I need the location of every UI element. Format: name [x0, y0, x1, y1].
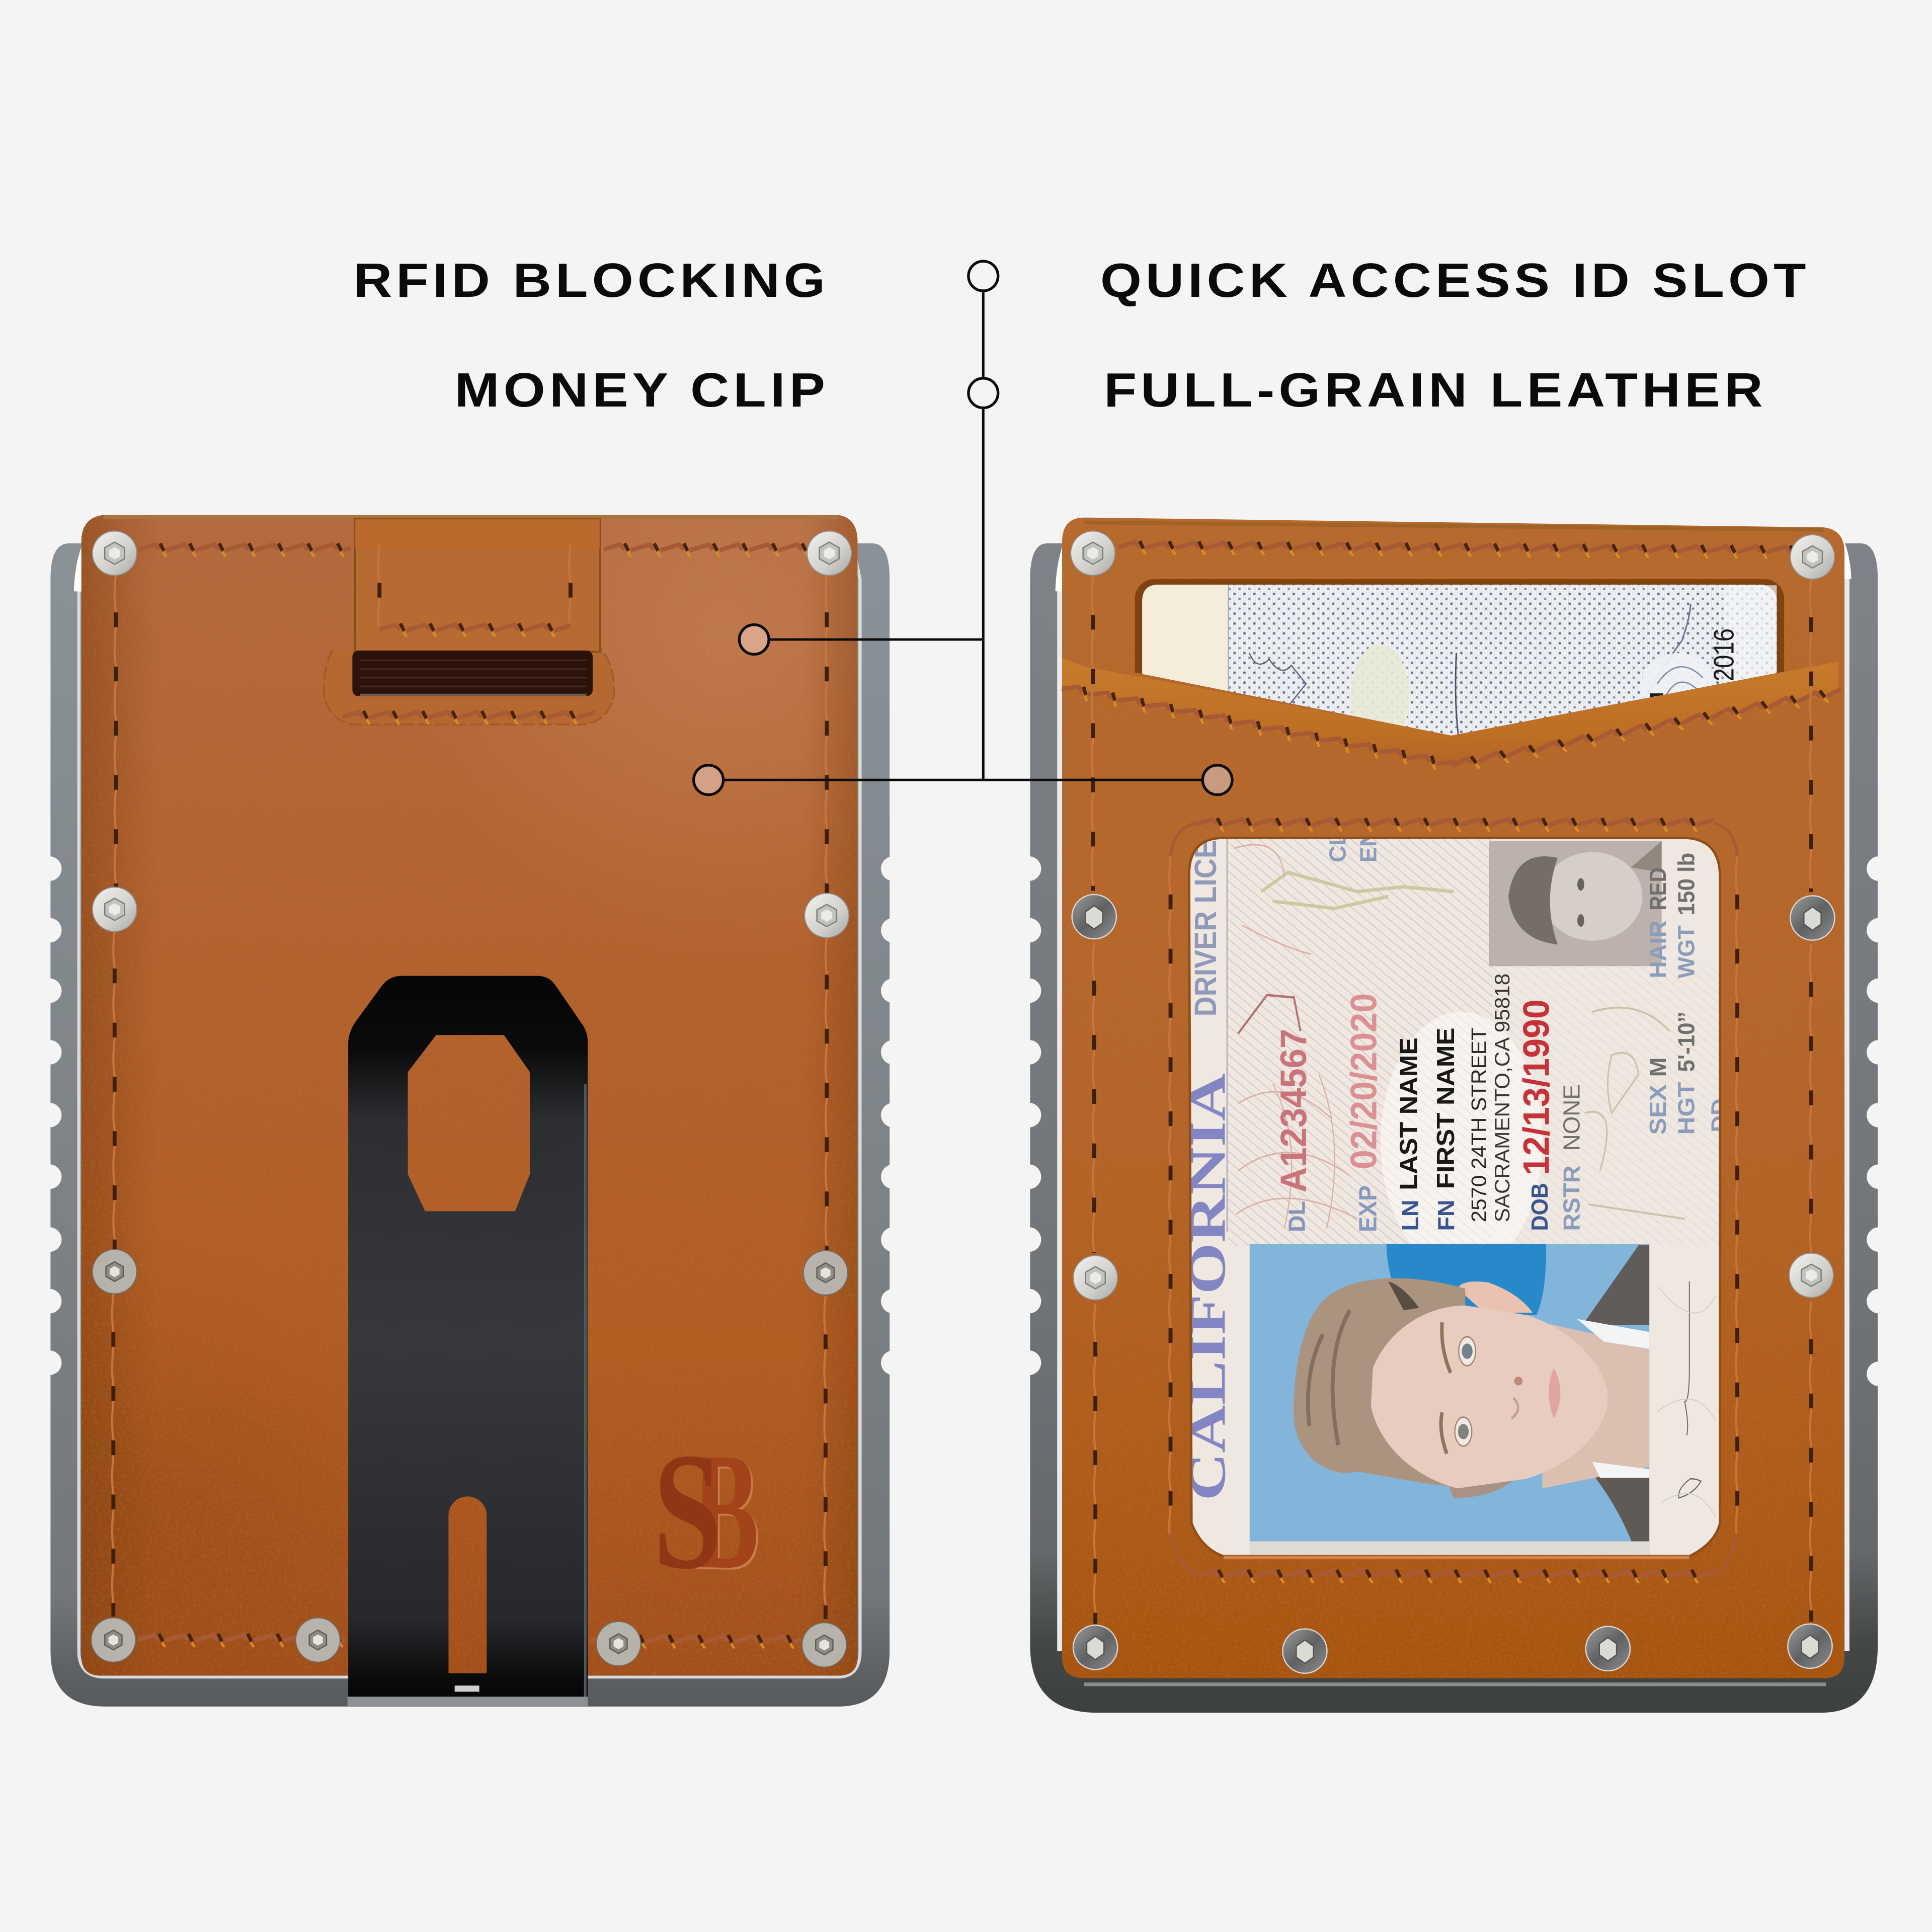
license number: DL — [1283, 1201, 1310, 1232]
leather panel: front wallet — [1054, 511, 1855, 1688]
metal frame: front wallet — [1016, 524, 1891, 1713]
leather panel: back wallet — [74, 505, 869, 1688]
wallet: back view with money clip — [37, 505, 906, 1707]
address: 2570 24TH STREET — [1467, 1027, 1490, 1222]
label: full-grain leather: FULL-GRAIN LEATHER — [1104, 364, 1767, 417]
card date: 2016 — [1708, 628, 1740, 681]
driver license in window: WGT — [1673, 925, 1699, 978]
ghost portrait — [1489, 841, 1662, 966]
marker: leather dot two — [694, 765, 723, 795]
driver license in window: SACRAMENTO,CA 95818 — [1490, 974, 1514, 1222]
driver license in window: FIRST NAME — [1432, 1027, 1460, 1189]
names: LN — [1397, 1200, 1423, 1231]
driver license in window: 12/13/1990 — [1515, 999, 1557, 1175]
embossed SB logo: B — [694, 1420, 761, 1606]
embossed SB logo: S — [653, 1418, 722, 1604]
driver license in window: HGT — [1673, 1082, 1699, 1135]
driver license in window: DD — [1706, 1098, 1732, 1133]
expiry: EXP — [1355, 1185, 1382, 1232]
screws: front wallet — [1071, 531, 1835, 1673]
portrait photo — [1250, 1244, 1649, 1541]
quick access ID slot with card — [1062, 579, 1838, 766]
money clip — [348, 976, 588, 1707]
driver license in window: CL — [1324, 831, 1350, 862]
marker: leather dot one — [739, 625, 769, 654]
top ID card: M — [1646, 692, 1668, 708]
driver license in window: 02/20/2020 — [1343, 993, 1385, 1169]
driver license in window — [1179, 782, 1732, 1565]
driver license in window: M — [1645, 1058, 1671, 1077]
metal frame: back wallet — [37, 530, 906, 1707]
top ID card — [1135, 579, 1784, 764]
ID window stitching — [1166, 815, 1742, 1583]
marker: money clip — [969, 378, 998, 408]
driver license in window: A1234567 — [1272, 1029, 1314, 1193]
driver license in window: 5'-10” — [1673, 1012, 1699, 1072]
physical details: SEX — [1645, 1084, 1671, 1135]
connector lines — [723, 291, 1202, 780]
driver license in window: LAST NAME — [1395, 1037, 1422, 1190]
label: RFID blocking: RFID BLOCKING — [354, 254, 829, 307]
marker: leather dot three — [1202, 765, 1232, 795]
pocket lip — [1062, 658, 1838, 766]
pocket stitching V — [1061, 679, 1843, 774]
state name: CALIFORNIA — [1179, 1073, 1236, 1501]
side stitching: front wallet — [1088, 577, 1816, 1624]
driver license in window: RED — [1645, 867, 1671, 911]
label: quick access ID slot: QUICK ACCESS ID SLOT — [1100, 254, 1810, 307]
driver license in window: FN — [1433, 1200, 1459, 1231]
top ID card: 0 — [1545, 714, 1570, 727]
plastic window sheen — [1190, 839, 1720, 1555]
wallet: front view with ID slots — [1016, 511, 1891, 1713]
driver license in window: NONE — [1559, 1084, 1585, 1151]
top stitching: front wallet — [1118, 537, 1794, 559]
driver license in window: EN — [1355, 830, 1382, 862]
signature — [1679, 1281, 1701, 1498]
screws: back wallet — [91, 531, 851, 1667]
label: money clip: MONEY CLIP — [455, 364, 829, 417]
date of birth: DOB — [1526, 1183, 1553, 1231]
pull tab with elastic slot — [324, 519, 614, 725]
license artwork drawn in card coordinates — [1234, 841, 1716, 1556]
infographic canvas — [50, 260, 1878, 1713]
window lower rim highlight — [1224, 1557, 1689, 1558]
stitching: back wallet — [109, 540, 832, 1649]
marker: RFID blocking — [969, 261, 998, 291]
driver license in window: HAIR — [1645, 920, 1671, 978]
ID window rim — [1190, 839, 1719, 1555]
embossed SB logo: B — [692, 1418, 759, 1604]
restrictions: RSTR — [1559, 1166, 1585, 1231]
driver license in window: 150 lb — [1673, 853, 1699, 916]
driver license in window: DRIVER LICENSE — [1188, 782, 1223, 1016]
